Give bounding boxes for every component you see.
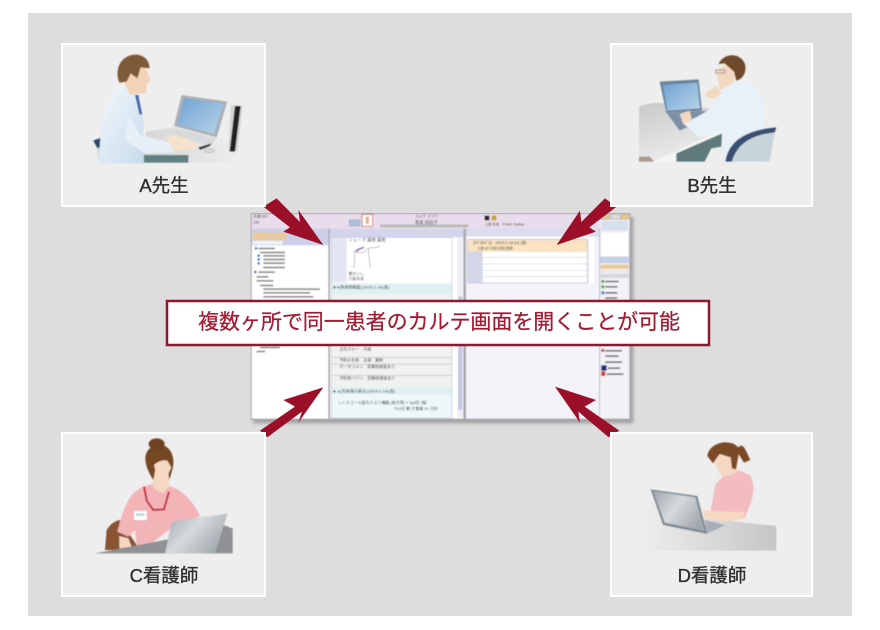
window title bar: 共通 MO xyxy=(253,213,268,218)
screen: electronic chart window xyxy=(251,213,633,423)
label: B doctor: B先生 xyxy=(687,175,737,196)
arrow: A to screen xyxy=(263,198,323,245)
window title bar xyxy=(252,213,630,229)
middle pane: chart records: 予約の名称 点滴 薬剤 xyxy=(339,356,383,362)
right pane: order form: [ｸﾘﾆｶﾙﾊﾟｽ] 2015.1.18 [A] (金) xyxy=(473,239,528,245)
body diagram xyxy=(354,247,380,268)
window title bar: DM xyxy=(253,221,259,225)
panel: C nurse xyxy=(62,433,265,596)
illustration: doctor at desktop xyxy=(93,55,243,163)
right pane: order form: 入院 ｶﾙﾃ 内科 田田 医師 xyxy=(477,245,513,250)
left pane: tree xyxy=(252,229,328,419)
window title bar: カルテ ブラウ xyxy=(415,213,438,218)
middle pane: chart records: ②抜糸あ xyxy=(348,275,364,281)
panel: D nurse xyxy=(611,433,812,596)
middle pane: chart records: 予約前ベバン 診察前検査あり xyxy=(339,374,395,380)
arrow: D to screen xyxy=(555,387,619,437)
arrow: B to screen xyxy=(557,198,617,245)
callout banner: 複数ヶ所で同一患者のカルテ画面を開くことが可能 xyxy=(198,311,680,334)
middle pane: chart records: ボーダコメン 診察前検査あり xyxy=(339,363,395,369)
middle pane: chart records xyxy=(330,229,463,419)
far right tool pane xyxy=(600,220,629,419)
middle pane: chart records: 1.レスコール投与ミスリ機能 (処方等) 7 5μ/回 7錠 xyxy=(338,399,427,405)
window title bar: 患者 田田子 xyxy=(415,219,438,226)
middle pane: chart records: -ｻ16日 朝 夕食後 31 日分 xyxy=(393,405,438,411)
right pane: order form xyxy=(466,229,599,419)
panel: B doctor xyxy=(611,44,812,206)
label: D nurse: D看護師 xyxy=(678,565,746,586)
panel: A doctor xyxy=(62,44,265,206)
arrow: C to screen xyxy=(260,387,323,437)
window title bar: 入院 外来 Printer Toolbar xyxy=(485,221,525,226)
illustration: nurse with lanyard xyxy=(95,438,233,553)
illustration: nurse with ponytail xyxy=(637,442,776,551)
middle pane: chart records: ■ ▲[外来指示表示] (2015.1.18)(金) xyxy=(333,388,396,394)
middle pane: chart records: ■ ●[再来時検査] (2015.1.18)(金) xyxy=(333,283,390,289)
label: C nurse: C看護師 xyxy=(130,565,198,586)
label: A doctor: A先生 xyxy=(139,175,189,196)
middle pane: chart records: 主任グルー 内視 xyxy=(339,346,371,352)
callout banner xyxy=(167,301,709,345)
middle pane: chart records: 便せいし xyxy=(348,270,364,276)
illustration: doctor at laptop xyxy=(639,55,776,162)
middle pane: chart records: シェーマ 薬剤 薬剤 xyxy=(349,237,386,244)
